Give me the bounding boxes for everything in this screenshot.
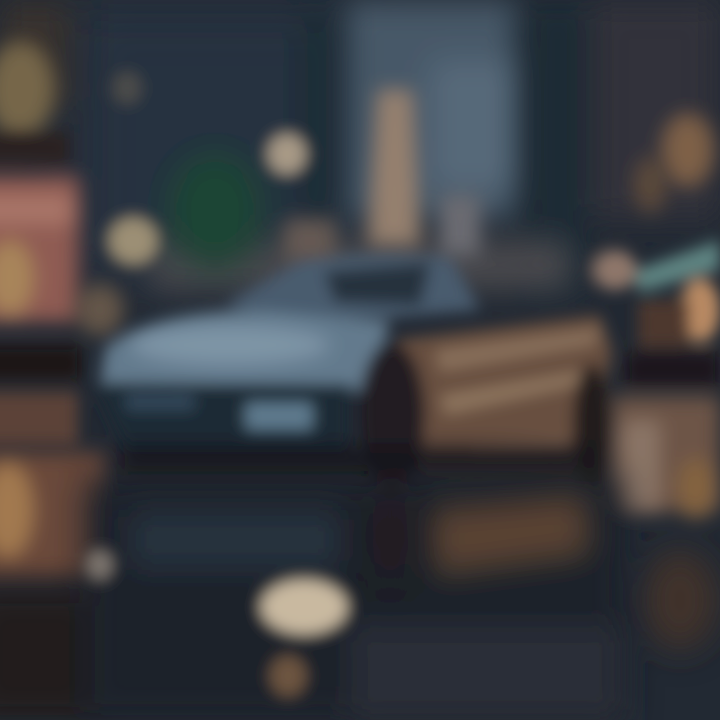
car hood: [100, 310, 390, 392]
bokeh lights: background highlights: [108, 71, 307, 265]
puddle highlights: bright reflections: [87, 550, 348, 697]
right storefronts: warm lights and teal awning: [593, 114, 720, 650]
car roof: [225, 254, 480, 325]
car front grille: [95, 385, 350, 450]
buildings: blurred skyline: [0, 0, 720, 290]
car headlight strip: [125, 394, 195, 410]
under-car shadow: [120, 447, 600, 471]
car windshield: [325, 263, 430, 305]
front wheel: [360, 343, 424, 487]
reflection: car mirrored on wet road: [130, 487, 620, 720]
car rear body: [395, 315, 612, 470]
left storefronts: warm glowing bands: [0, 42, 124, 720]
car hood highlight: [130, 325, 330, 365]
car: central vehicle: [95, 254, 612, 487]
car body highlight stripes: [435, 328, 600, 460]
rear wheel: [574, 365, 610, 485]
ground: dark wet road: [85, 480, 625, 720]
tree: green foliage: [167, 152, 263, 268]
tower: pale distant building: [285, 90, 480, 260]
car licence plate: [245, 402, 313, 430]
